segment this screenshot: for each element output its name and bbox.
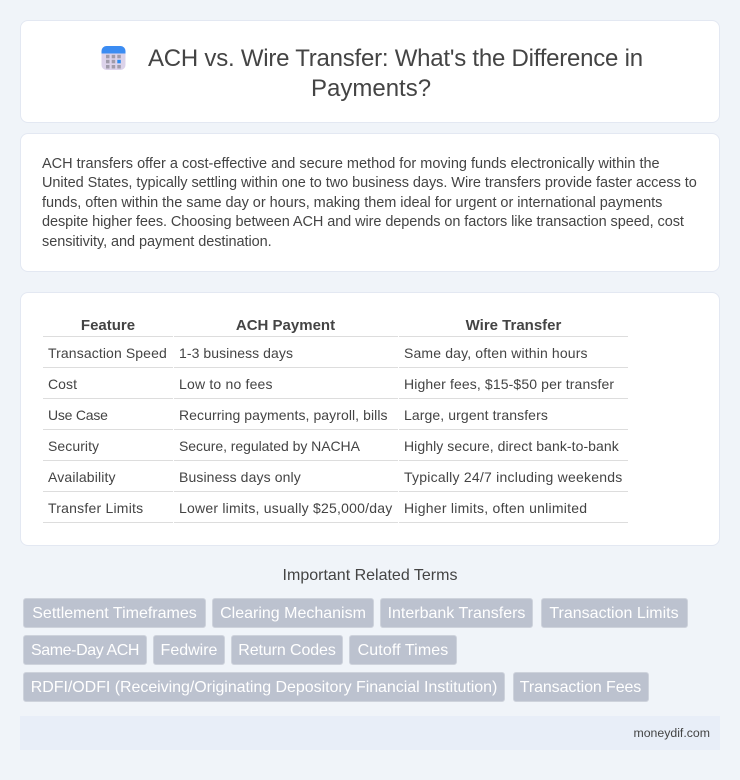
intro paragraph: despite higher fees. Choosing between ACH and wire depends on factors like transaction speed, cost bbox=[42, 214, 684, 230]
row: transaction speed bbox=[48, 345, 588, 361]
tag: Same-Day ACH bbox=[31, 642, 139, 659]
related terms tags bbox=[23, 598, 688, 702]
tag bbox=[380, 598, 533, 628]
header panel bbox=[20, 20, 720, 123]
tag bbox=[231, 635, 343, 665]
row: cost: Low to no fees bbox=[179, 376, 273, 392]
title bbox=[148, 45, 643, 102]
tag bbox=[23, 672, 505, 702]
row: availability: Typically 24/7 including weekends bbox=[404, 469, 622, 485]
row: transaction speed: Same day, often within hours bbox=[404, 345, 588, 361]
row: use case: Use Case bbox=[48, 407, 108, 423]
tag: Transaction Fees bbox=[520, 679, 641, 696]
row: security bbox=[48, 438, 619, 454]
tag bbox=[23, 635, 147, 665]
row: use case bbox=[48, 407, 548, 423]
tag: Fedwire bbox=[161, 642, 217, 659]
footer source text: moneydif.com bbox=[633, 726, 710, 740]
intro paragraph: ACH transfers offer a cost-effective and secure method for moving funds electronically within the bbox=[42, 156, 660, 172]
tag bbox=[23, 598, 206, 628]
tag: Cutoff Times bbox=[358, 642, 448, 659]
table header: ACH Payment bbox=[236, 317, 335, 334]
tag: Transaction Limits bbox=[549, 605, 679, 622]
comparison table panel bbox=[20, 292, 720, 546]
row: transfer limits: Higher limits, often unlimited bbox=[404, 500, 587, 516]
tag bbox=[349, 635, 457, 665]
table header: Wire Transfer bbox=[466, 317, 561, 334]
intro text panel bbox=[20, 133, 720, 272]
row: transfer limits bbox=[48, 500, 587, 516]
intro paragraph: funds, often within the same day or hours, making them ideal for urgent or international payments bbox=[42, 195, 662, 211]
tag bbox=[512, 672, 648, 702]
tag: Settlement Timeframes bbox=[32, 605, 197, 622]
row: use case: Recurring payments, payroll, bills bbox=[179, 407, 388, 423]
tag: Return Codes bbox=[238, 642, 336, 659]
row: transfer limits: Lower limits, usually $25,000/day bbox=[179, 500, 392, 516]
table header: Feature bbox=[81, 317, 135, 334]
row: cost: Cost bbox=[48, 376, 77, 392]
intro paragraph bbox=[42, 156, 697, 250]
tag: Interbank Transfers bbox=[388, 605, 525, 622]
row: availability: Business days only bbox=[179, 469, 301, 485]
row: transaction speed: 1-3 business days bbox=[179, 345, 293, 361]
related terms heading: Important Related Terms bbox=[283, 567, 457, 584]
intro paragraph: United States, typically settling within one to two business days. Wire transfers provide faster access to bbox=[42, 175, 697, 191]
icon: calendar bbox=[102, 46, 126, 70]
row: cost bbox=[48, 376, 614, 392]
row: cost: Higher fees, $15-$50 per transfer bbox=[404, 376, 614, 392]
row: transfer limits: Transfer Limits bbox=[48, 500, 143, 516]
row: security: Secure, regulated by NACHA bbox=[179, 438, 360, 454]
row: availability bbox=[48, 469, 622, 485]
title: Payments? bbox=[311, 75, 431, 102]
row: use case: Large, urgent transfers bbox=[404, 407, 548, 423]
table header bbox=[81, 317, 562, 334]
tag: Clearing Mechanism bbox=[220, 605, 366, 622]
intro paragraph: sensitivity, and payment destination. bbox=[42, 234, 272, 250]
row: availability: Availability bbox=[48, 469, 116, 485]
footer bar bbox=[20, 716, 720, 750]
tag bbox=[540, 598, 688, 628]
tag: RDFI/ODFI (Receiving/Originating Depository Financial Institution) bbox=[31, 679, 497, 696]
row: security: Security bbox=[48, 438, 99, 454]
tag bbox=[212, 598, 374, 628]
tag bbox=[153, 635, 225, 665]
title: ACH vs. Wire Transfer: What's the Difference in bbox=[148, 45, 643, 72]
row: security: Highly secure, direct bank-to-bank bbox=[404, 438, 619, 454]
row: transaction speed: Transaction Speed bbox=[48, 345, 167, 361]
